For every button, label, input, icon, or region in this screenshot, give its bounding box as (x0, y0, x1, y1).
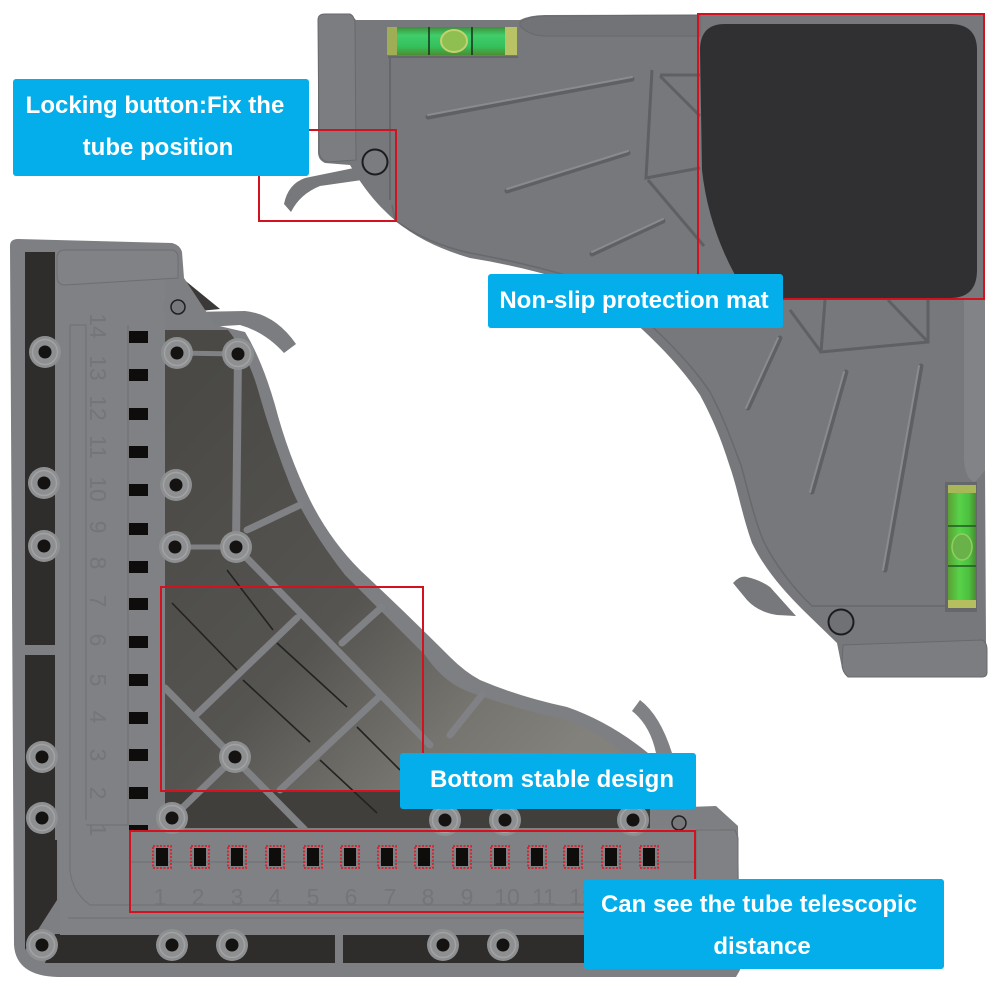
horizontal scale numbers: 9 (461, 884, 473, 910)
dark bottom channel (45, 934, 668, 963)
horizontal arm (60, 828, 720, 935)
corner cap: right end (696, 830, 738, 968)
label: telescopic distance: distance (713, 933, 811, 960)
callout frame: locking button (259, 130, 396, 221)
vertical scale numbers: 13 (85, 355, 111, 381)
horizontal scale numbers: 5 (307, 884, 319, 910)
bubble level: top (387, 27, 517, 55)
vertical slots (129, 331, 148, 831)
end cap: top (318, 14, 356, 162)
end pivot button (672, 816, 686, 830)
label: non-slip protection mat (488, 274, 783, 328)
pivot button (163, 292, 193, 322)
mounting bosses (26, 336, 649, 961)
label: bottom stable design (400, 753, 696, 809)
clamp body (318, 14, 987, 677)
end cap: bottom (842, 640, 987, 677)
vertical scale numbers (85, 313, 111, 836)
vertical scale numbers: 2 (85, 787, 111, 799)
vertical scale numbers: 5 (85, 674, 111, 686)
lever: pivot backing wedge (182, 278, 220, 312)
vertical scale numbers: 11 (85, 435, 111, 459)
horizontal scale numbers: 1 (154, 884, 166, 910)
panel: bottom-left clamp photo (10, 239, 740, 977)
vertical scale numbers: 14 (85, 313, 111, 339)
label: bottom stable design: Bottom stable design (430, 766, 674, 793)
bubble level: right (945, 482, 977, 612)
horizontal scale numbers: 12 (569, 884, 595, 910)
horizontal scale numbers: 6 (345, 884, 357, 910)
vertical scale numbers: 8 (85, 557, 111, 569)
interior ribs (165, 353, 482, 830)
horizontal scale numbers: 2 (192, 884, 204, 910)
vertical arm (55, 250, 165, 840)
horizontal scale numbers: 4 (269, 884, 282, 910)
horizontal scale numbers: 10 (494, 884, 520, 910)
label: locking button: Locking button:Fix the (26, 92, 284, 119)
vertical scale numbers: 10 (85, 476, 111, 502)
ridges: diagonal grips (428, 77, 921, 570)
interior bottom shadow band (165, 792, 650, 830)
arm grooves (68, 325, 696, 918)
dotted slot markers (153, 846, 658, 868)
callout frame: telescopic distance (130, 831, 695, 912)
vertical scale numbers: 1 (85, 824, 111, 836)
raised top strip (520, 15, 700, 36)
corner cap: top (57, 250, 178, 285)
horizontal scale numbers: 11 (532, 884, 556, 910)
vertical scale numbers: 12 (85, 395, 111, 421)
interior cavity (165, 330, 650, 830)
label: telescopic distance (584, 879, 944, 969)
horizontal scale numbers: 8 (422, 884, 434, 910)
label: telescopic distance: Can see the tube telescopic (601, 891, 917, 918)
button: lower locking button (828, 608, 854, 636)
callout frame: non-slip mat (698, 14, 984, 299)
raised right strip (964, 300, 985, 482)
dark left channel (25, 252, 57, 950)
lever: right lever (632, 700, 672, 753)
label: locking button: tube position (83, 134, 233, 161)
horizontal scale numbers (154, 884, 595, 910)
inner frame lines (388, 57, 518, 200)
vertical scale numbers: 3 (85, 749, 111, 761)
label: locking button (13, 79, 309, 176)
lever: left lever (190, 311, 296, 353)
vertical scale numbers: 7 (85, 595, 111, 607)
horizontal slots (156, 848, 655, 866)
panel: top-right clamp photo (284, 14, 987, 677)
vertical scale numbers: 9 (85, 521, 111, 533)
lever: lower locking lever (733, 577, 796, 616)
edge rim (392, 205, 945, 606)
lever: upper locking lever (284, 168, 362, 212)
callout frame: bottom stable design (161, 587, 423, 791)
label: non-slip protection mat: Non-slip protection mat (499, 287, 769, 314)
non-slip mat (700, 24, 977, 298)
interior dark grooves (172, 570, 400, 813)
vertical scale numbers: 6 (85, 634, 111, 646)
vertical scale numbers: 4 (85, 711, 111, 724)
clamp body (10, 239, 740, 977)
button: upper locking button (362, 148, 388, 176)
triangular ribs (646, 70, 928, 352)
horizontal scale numbers: 3 (231, 884, 243, 910)
horizontal scale numbers: 7 (384, 884, 396, 910)
